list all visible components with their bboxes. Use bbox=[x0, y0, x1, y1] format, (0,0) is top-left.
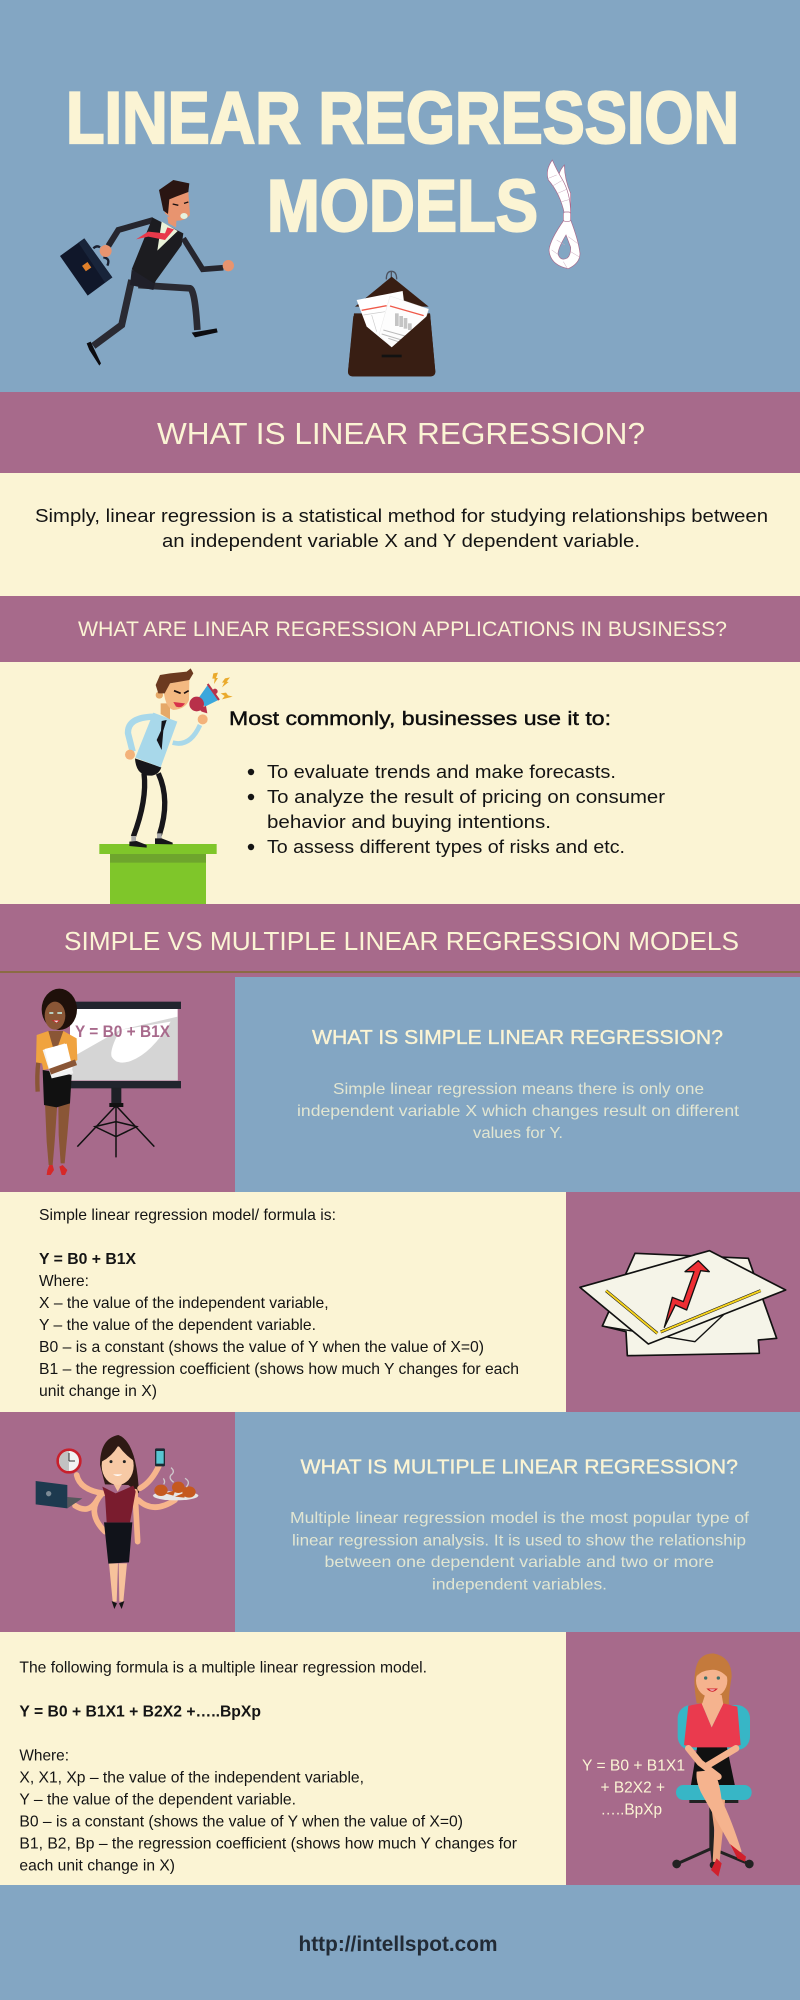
panel: multiple formula bbox=[0, 1632, 566, 1885]
panel: what is multiple linear regression: Multiple linear regression model is the most popular type of bbox=[290, 1510, 750, 1527]
panel: simple formula: X – the value of the independent variable, bbox=[39, 1295, 329, 1312]
icon: woman at projection screen bbox=[36, 989, 181, 1175]
panel: multitasking illustration bbox=[0, 1412, 235, 1632]
panel: simple formula: B0 – is a constant (shows the value of Y when the value of X=0) bbox=[39, 1339, 484, 1356]
icon: man with megaphone on podium bbox=[99, 668, 233, 904]
panel: what is multiple linear regression: between one dependent variable and two or more bbox=[324, 1554, 714, 1571]
panel: applications heading: WHAT ARE LINEAR REGRESSION APPLICATIONS IN BUSINESS? bbox=[78, 617, 727, 641]
panel: definition: an independent variable X and Y dependent variable. bbox=[162, 531, 640, 551]
formula beside woman: + B2X2 + bbox=[600, 1780, 665, 1796]
panel: simple vs multiple heading bbox=[0, 904, 800, 977]
panel: simple formula: Simple linear regression model/ formula is: bbox=[39, 1207, 336, 1224]
panel: simple vs multiple heading: SIMPLE VS MULTIPLE LINEAR REGRESSION MODELS bbox=[64, 926, 739, 956]
panel: simple formula: B1 – the regression coefficient (shows how much Y changes for each bbox=[39, 1361, 519, 1378]
bullet list: To evaluate trends and make forecasts. bbox=[267, 762, 616, 782]
panel: what is simple linear regression bbox=[235, 977, 800, 1192]
panel: simple formula bbox=[0, 1192, 566, 1412]
panel: header background bbox=[0, 0, 800, 392]
panel: footer bbox=[0, 1885, 800, 2000]
panel: what is simple linear regression: values for Y. bbox=[473, 1125, 563, 1142]
panel: presenter illustration bbox=[0, 973, 235, 1192]
icon: envelope with documents bbox=[348, 271, 435, 376]
panel: what is linear regression heading bbox=[0, 392, 800, 473]
icon: noose-shaped tie bbox=[547, 160, 580, 269]
icon: running businessman bbox=[60, 180, 234, 366]
panel: multiple formula: B1, B2, Bp – the regression coefficient (shows how much Y changes for bbox=[19, 1836, 518, 1852]
panel: what is simple linear regression: Simple linear regression means there is only one bbox=[333, 1081, 704, 1098]
panel: seated woman illustration bbox=[566, 1632, 800, 1885]
panel: definition: Simply, linear regression is a statistical method for studying relationships between bbox=[35, 506, 768, 526]
panel: footer: http://intellspot.com bbox=[298, 1933, 498, 1956]
formula beside woman: …..BpXp bbox=[600, 1802, 662, 1818]
title: MODELS bbox=[267, 166, 538, 247]
panel: applications bbox=[0, 662, 800, 904]
icon: papers with rising arrow bbox=[580, 1251, 786, 1356]
panel: simple formula: Y = B0 + B1X bbox=[39, 1251, 136, 1268]
bullet list bbox=[248, 762, 665, 857]
formula on screen: Y = B0 + B1X bbox=[75, 1023, 170, 1041]
panel: what is multiple linear regression: independent variables. bbox=[432, 1576, 607, 1594]
formula beside woman bbox=[582, 1758, 685, 1818]
bullet list: To assess different types of risks and etc. bbox=[267, 837, 625, 857]
panel: definition bbox=[0, 473, 800, 596]
title bbox=[66, 78, 739, 247]
panel: multiple formula: X, X1, Xp – the value of the independent variable, bbox=[19, 1770, 364, 1786]
panel: multiple formula: Y – the value of the dependent variable. bbox=[19, 1792, 296, 1808]
icon: multitasking woman bbox=[36, 1435, 198, 1609]
panel: simple formula: Y – the value of the dependent variable. bbox=[39, 1317, 316, 1334]
panel: multiple formula: B0 – is a constant (shows the value of Y when the value of X=0) bbox=[19, 1814, 463, 1830]
bullet list: behavior and buying intentions. bbox=[267, 812, 551, 832]
panel: what is multiple linear regression: WHAT IS MULTIPLE LINEAR REGRESSION? bbox=[300, 1456, 738, 1478]
panel: multiple formula: Where: bbox=[19, 1748, 69, 1764]
panel: what is multiple linear regression: linear regression analysis. It is used to show the relationship bbox=[292, 1532, 746, 1550]
panel: multiple formula: Y = B0 + B1X1 + B2X2 +…..BpXp bbox=[19, 1704, 261, 1720]
intro line: Most commonly, businesses use it to: bbox=[229, 708, 611, 730]
bullet list: To analyze the result of pricing on consumer bbox=[267, 787, 665, 807]
formula beside woman: Y = B0 + B1X1 bbox=[582, 1758, 685, 1774]
panel: what is multiple linear regression bbox=[235, 1412, 800, 1632]
panel: what is simple linear regression: WHAT IS SIMPLE LINEAR REGRESSION? bbox=[312, 1026, 723, 1049]
panel: what is linear regression heading: WHAT IS LINEAR REGRESSION? bbox=[157, 417, 645, 451]
icon: woman on office chair bbox=[672, 1653, 754, 1877]
panel: multiple formula: The following formula is a multiple linear regression model. bbox=[19, 1660, 427, 1676]
panel: multiple formula: each unit change in X) bbox=[19, 1858, 175, 1874]
panel: what is simple linear regression: independent variable X which changes result on different bbox=[297, 1103, 740, 1120]
panel: chart papers illustration bbox=[566, 1192, 800, 1412]
panel: simple formula: unit change in X) bbox=[39, 1383, 157, 1400]
panel: simple formula: Where: bbox=[39, 1273, 89, 1290]
panel: applications heading bbox=[0, 596, 800, 662]
